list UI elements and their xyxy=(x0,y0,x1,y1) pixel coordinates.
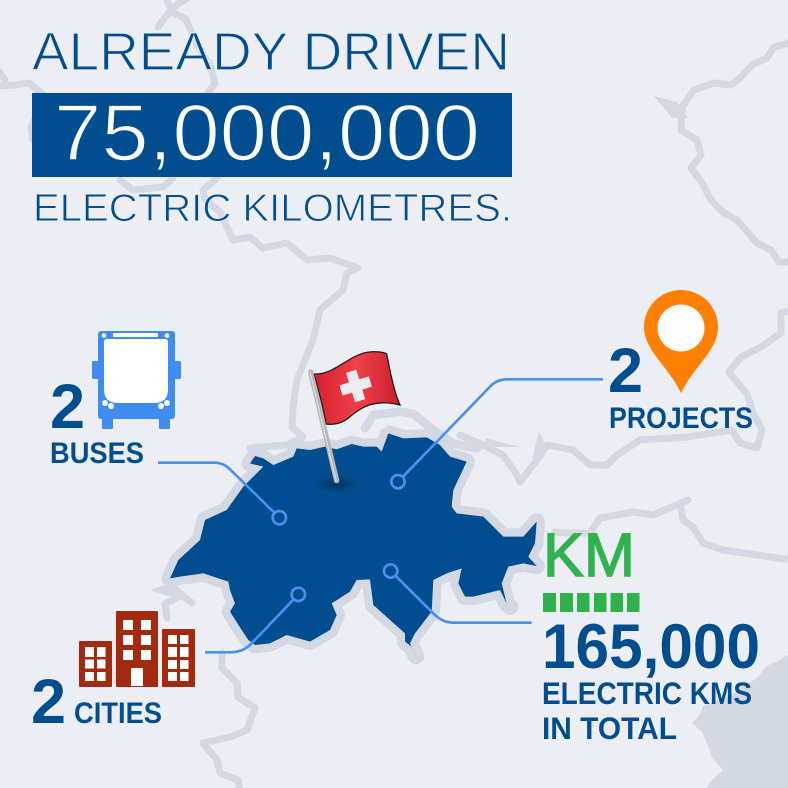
stat: 2 cities: CITIES xyxy=(74,697,162,730)
icon: KM with charge bar: KM xyxy=(543,521,635,589)
stat: 2 buses: BUSES xyxy=(50,437,144,470)
headline number: 75,000,000 xyxy=(54,88,480,177)
flag on pole xyxy=(310,352,400,493)
subheading: electric kilometres: ELECTRIC KILOMETRES. xyxy=(33,187,512,230)
stat: 2 projects xyxy=(608,336,753,435)
stat: 2 cities: 2 xyxy=(31,667,66,737)
background map: spikes xyxy=(150,96,688,600)
leader line: projects xyxy=(391,379,603,488)
stat: 165,000 electric kms in total: ELECTRIC KMS xyxy=(542,675,752,711)
stat: 2 buses: 2 xyxy=(50,372,85,442)
stat: 165,000 electric kms in total xyxy=(542,612,760,746)
stat: 2 projects: PROJECTS xyxy=(609,402,753,435)
stat: 165,000 electric kms in total: 165,000 xyxy=(542,612,760,682)
stat: 2 buses xyxy=(50,372,144,470)
icon: bus xyxy=(92,331,181,429)
heading: already driven: ALREADY DRIVEN xyxy=(32,22,510,82)
stat: 165,000 electric kms in total: IN TOTAL xyxy=(542,710,677,746)
stat: 2 cities xyxy=(31,667,162,737)
stat: 2 projects: 2 xyxy=(608,336,643,406)
headline banner xyxy=(32,88,512,177)
icon: city buildings xyxy=(79,611,195,687)
leader line: electric kms xyxy=(384,564,532,623)
map of Switzerland xyxy=(170,412,537,656)
leader line: cities xyxy=(205,588,305,652)
leader line: buses xyxy=(158,463,286,524)
icon: location pin xyxy=(644,290,718,393)
background map: sea xyxy=(692,652,788,788)
